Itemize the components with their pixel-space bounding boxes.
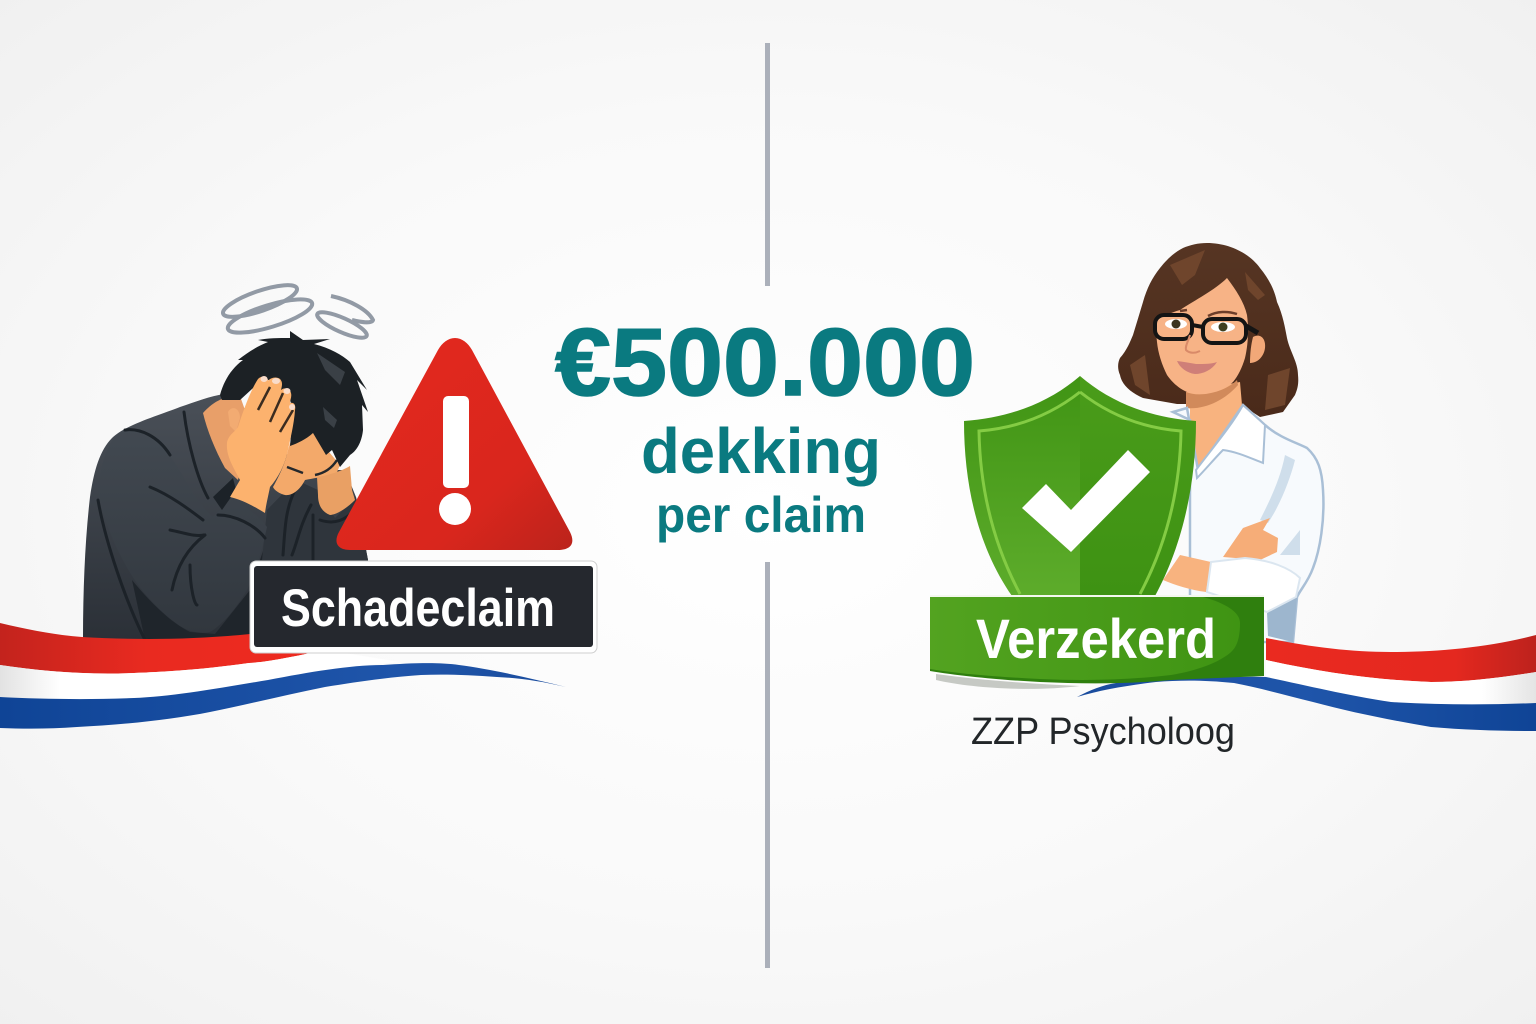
label: Verzekerd: Verzekerd xyxy=(976,607,1216,670)
blue band xyxy=(0,663,566,729)
torso xyxy=(83,394,368,640)
finger lines xyxy=(258,387,293,432)
divider bottom xyxy=(765,562,770,968)
nose xyxy=(1186,335,1200,353)
second hand xyxy=(317,466,355,515)
left flag ribbon xyxy=(0,623,566,729)
face xyxy=(273,433,340,495)
torso shadow xyxy=(132,520,368,640)
shirt lower shadow xyxy=(1267,597,1297,642)
hair xyxy=(220,331,368,467)
finger nails xyxy=(260,376,295,410)
hair highlights xyxy=(1130,250,1290,410)
hair xyxy=(1118,243,1298,417)
lower forearm xyxy=(1163,555,1211,592)
ear xyxy=(1250,336,1265,363)
banner lighter face xyxy=(930,597,1240,680)
divider top xyxy=(765,43,770,286)
banner base xyxy=(930,597,1264,683)
label: Schadeclaim: Schadeclaim xyxy=(281,579,555,638)
neck and chest xyxy=(1186,382,1242,480)
neck xyxy=(203,396,252,480)
illustration: stressed man xyxy=(83,331,368,640)
ear xyxy=(228,408,240,432)
icon: green shield with check xyxy=(964,376,1196,596)
front chest and second sleeve xyxy=(262,480,368,560)
shirt creases xyxy=(98,412,355,640)
label: Verzekerd xyxy=(930,595,1264,689)
left half xyxy=(964,376,1080,596)
right half xyxy=(1080,376,1196,596)
hand xyxy=(227,377,295,513)
caption: ZZP Psycholoog: ZZP Psycholoog xyxy=(971,711,1235,753)
shirt xyxy=(1173,405,1323,642)
shirt shadows xyxy=(1260,455,1300,555)
face xyxy=(1155,278,1248,394)
sleeve xyxy=(1207,558,1300,612)
red band xyxy=(1266,635,1536,682)
hand xyxy=(1223,518,1278,560)
banner shadow xyxy=(936,674,1080,689)
collar gap xyxy=(213,478,236,510)
collar xyxy=(1196,405,1265,478)
icon: dizzy swirls xyxy=(220,279,373,342)
glasses xyxy=(1155,315,1258,343)
subheading: dekking: dekking xyxy=(641,415,881,487)
eye line and glasses xyxy=(287,460,337,475)
eyes xyxy=(1165,319,1235,332)
banner top edge xyxy=(930,595,1264,597)
subheading: per claim: per claim xyxy=(656,487,866,543)
mouth xyxy=(1177,361,1217,374)
hair highlights xyxy=(317,353,345,428)
white band xyxy=(0,650,400,699)
eyebrows xyxy=(1180,310,1237,316)
inner outline xyxy=(979,392,1181,594)
red band xyxy=(0,623,326,674)
illustration: woman xyxy=(1118,243,1323,642)
headline amount: €500.000 xyxy=(555,309,975,416)
label: Schadeclaim xyxy=(250,561,597,653)
neck shadow xyxy=(1186,380,1238,408)
sleeve xyxy=(98,430,267,633)
check mark xyxy=(1022,450,1150,552)
right flag ribbon xyxy=(1077,635,1536,731)
white band xyxy=(1266,660,1536,704)
icon: warning triangle xyxy=(336,338,572,550)
blue band xyxy=(1077,677,1536,731)
